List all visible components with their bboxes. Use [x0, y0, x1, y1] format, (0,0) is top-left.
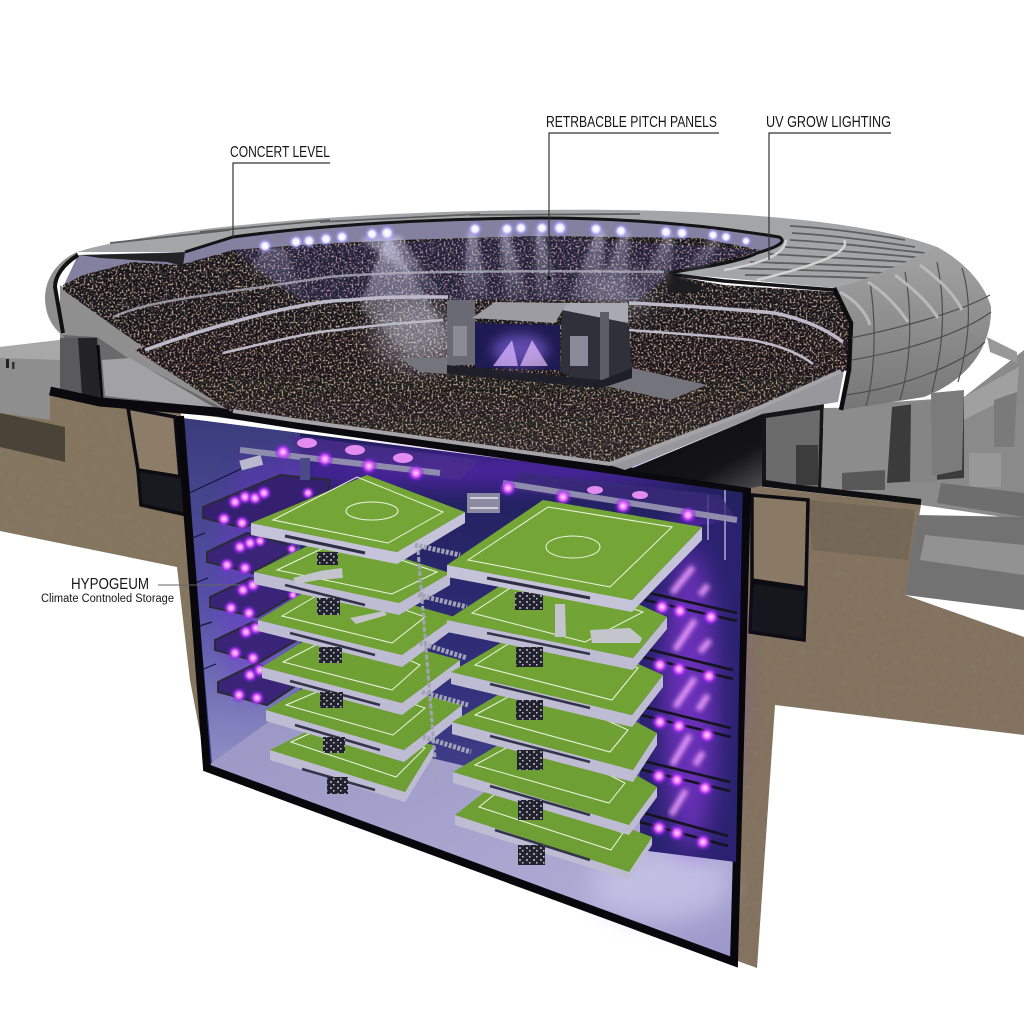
actuator L3 — [319, 647, 342, 663]
actuator R3 — [516, 700, 543, 720]
panel L3 — [258, 580, 455, 667]
label: concert level: CONCERT LEVEL — [230, 144, 330, 161]
label: hypogeum — [41, 576, 240, 605]
panel R2 — [447, 560, 667, 670]
section black band — [757, 483, 921, 502]
left wall — [182, 418, 300, 762]
actuator R6 — [518, 845, 545, 865]
columns and recesses — [887, 397, 964, 483]
section room — [757, 402, 824, 493]
left wall seams — [185, 467, 245, 672]
LED ribbon arcs — [145, 297, 448, 350]
left roof end shell — [45, 252, 78, 335]
actuator R2 — [516, 647, 543, 667]
right service duct — [750, 495, 808, 640]
roof slat lines — [110, 214, 960, 282]
right soil — [735, 485, 1024, 968]
video screen — [475, 323, 560, 370]
stage roof — [472, 302, 567, 323]
floor — [207, 720, 735, 960]
upper concourse ring — [113, 271, 664, 317]
actuator L4 — [320, 692, 343, 708]
panel R4 — [452, 670, 657, 782]
left exterior plaza — [0, 340, 80, 420]
panel R6 — [455, 780, 652, 880]
facade rim — [834, 288, 851, 410]
base floor — [757, 350, 1024, 520]
column block — [821, 407, 892, 493]
actuator R1 — [515, 592, 543, 610]
right stage box — [560, 310, 632, 387]
stage floor apron — [400, 358, 707, 400]
panel R3 — [451, 620, 663, 727]
actuator L1 — [317, 552, 338, 565]
right facade — [834, 247, 991, 410]
right column pitch panels — [447, 500, 702, 880]
purple wash on upper tier — [233, 236, 760, 300]
hypogeum shaft — [180, 416, 750, 962]
figures — [6, 359, 9, 368]
left soil — [0, 390, 207, 770]
concert light beams — [113, 228, 843, 372]
left under-roof beam — [80, 252, 185, 266]
central support truss — [415, 545, 471, 783]
label: retractable pitch panels: RETRBACBLE PITCH PANELS — [546, 114, 717, 131]
panel L2 — [254, 535, 450, 615]
panel L5 — [266, 670, 462, 762]
left column pitch panels — [251, 475, 465, 802]
roof curved ring beams — [724, 240, 935, 285]
actuator R5 — [518, 800, 543, 820]
roof inner edge — [185, 218, 782, 273]
shaft outline — [180, 416, 747, 962]
right UV light racks — [639, 490, 742, 862]
actuator L6 — [327, 777, 348, 794]
seating bowl crowd — [63, 236, 851, 465]
label: UV grow lighting — [766, 114, 891, 260]
back wall — [182, 418, 750, 958]
concert spotlights — [257, 219, 752, 254]
panel L6 — [270, 722, 434, 802]
left service duct — [128, 408, 187, 515]
stage base — [447, 365, 632, 388]
roof underside block — [666, 273, 703, 293]
roof plate — [77, 210, 991, 307]
bowl structural section left — [50, 285, 750, 489]
actuator R4 — [517, 750, 543, 770]
left UV light racks — [203, 475, 330, 706]
label: hypogeum: HYPOGEUM — [71, 576, 149, 593]
ramp arcs — [964, 367, 1019, 420]
left light tower — [447, 300, 475, 365]
label: UV grow lighting: UV GROW LIGHTING — [766, 114, 891, 131]
roof lower edge — [668, 274, 834, 290]
label: hypogeum: Climate Contnoled Storage — [41, 593, 174, 605]
actuator L5 — [323, 737, 345, 753]
ceiling lighting truss — [239, 435, 737, 524]
label: retractable pitch panels — [546, 114, 719, 280]
ceiling strip under the roof — [63, 218, 782, 287]
panel R5 — [453, 720, 657, 835]
purple ambient glow — [653, 510, 737, 850]
panel L4 — [262, 625, 460, 715]
actuator L2 — [317, 598, 340, 615]
front floor strip — [233, 371, 841, 464]
panel L1 — [251, 475, 465, 564]
concert stage — [400, 300, 707, 400]
panel R1 — [447, 500, 702, 612]
stadium roof — [77, 210, 991, 307]
right exterior lower structure — [757, 337, 1024, 610]
bowl structural section right — [600, 365, 845, 488]
label: concert level — [230, 144, 330, 237]
plaza block and steps — [969, 453, 1001, 487]
